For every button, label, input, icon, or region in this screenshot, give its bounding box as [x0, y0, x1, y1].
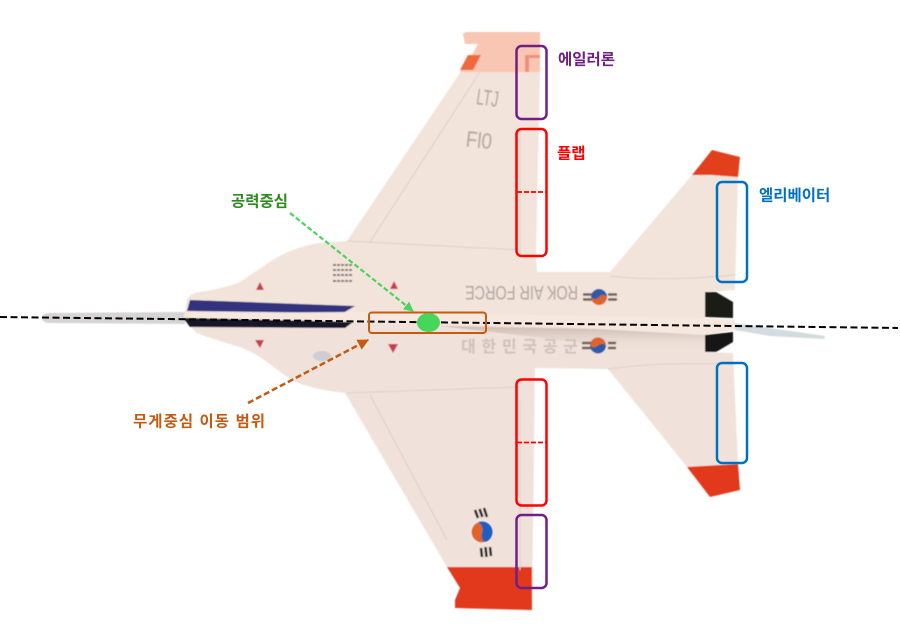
- aircraft illustration: [42, 32, 825, 610]
- smudge on lower nose: [313, 351, 331, 361]
- bottom elevator box: [717, 363, 747, 463]
- top wing tip stripe: [460, 55, 481, 70]
- green arrow: [290, 213, 413, 311]
- taegeuk wing roundel: [470, 508, 494, 557]
- top aileron box: [516, 46, 546, 119]
- aileron marking: [525, 55, 540, 72]
- centre of gravity range box: [369, 312, 486, 333]
- label: aileron: 에일러론: [558, 50, 615, 68]
- fuselage roundel top: [583, 289, 617, 305]
- lower half of fuselage and wing: [183, 320, 740, 610]
- bottom flap box: [516, 380, 546, 506]
- bottom nozzle: [705, 332, 733, 352]
- centre light band: [187, 312, 735, 335]
- top elevator box: [717, 182, 747, 282]
- wing lettering 1: LTJ: [475, 84, 500, 112]
- fuselage lettering Korean: 대한민국공군: [461, 338, 578, 356]
- vent grid: [333, 265, 352, 281]
- longitudinal axis dashed line: [0, 317, 898, 328]
- label: centre of gravity range: 무게중심 이동 범위: [133, 412, 265, 430]
- bottom aileron box: [516, 515, 546, 588]
- bottom wing tip: [447, 567, 532, 610]
- upper half of fuselage and wing: [183, 32, 740, 320]
- top flap box: [516, 129, 546, 256]
- fuselage lettering ROK AIR FORCE: ROK AIR FORCE: [465, 281, 578, 302]
- nose probe: [42, 312, 185, 324]
- label: flap: 플랩: [557, 144, 586, 162]
- top nozzle: [705, 292, 733, 318]
- dark underside stripe: [183, 318, 353, 328]
- shading of lower fuselage: [440, 326, 705, 352]
- panel lines: [347, 72, 735, 570]
- orange arrow: [248, 340, 368, 403]
- centre of lift dot: [417, 313, 440, 332]
- label: centre of lift: 공력중심: [231, 192, 288, 210]
- fuselage roundel bottom: [582, 338, 616, 354]
- blue stripe: [187, 300, 355, 313]
- tail boom: [735, 323, 825, 339]
- top tail tip: [692, 150, 740, 177]
- warning triangles: [255, 281, 398, 353]
- top wing tip: [460, 32, 540, 72]
- wing lettering 2: Fl0: [465, 127, 493, 154]
- bottom tail tip: [687, 464, 740, 497]
- label: elevator: 엘리베이터: [759, 186, 830, 204]
